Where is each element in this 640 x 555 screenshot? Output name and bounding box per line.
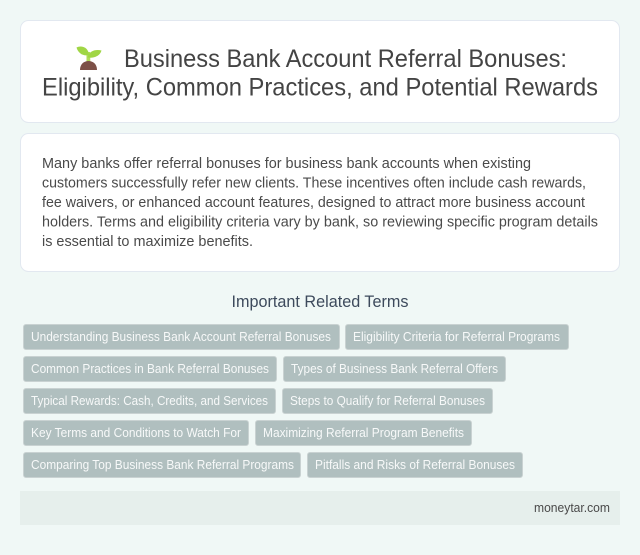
description text: fee waivers, or enhanced account features, designed to attract more business account	[42, 194, 586, 211]
tag 10: Pitfalls and Risks of Referral Bonuses	[315, 458, 515, 472]
tag 2	[346, 324, 568, 350]
tag 2: Eligibility Criteria for Referral Programs	[353, 330, 560, 344]
tag 3: Common Practices in Bank Referral Bonuses	[31, 362, 269, 376]
tag 5: Typical Rewards: Cash, Credits, and Services	[31, 394, 268, 408]
tag 1	[24, 324, 340, 350]
description text: customers successfully refer new clients. These incentives often include cash rewards,	[42, 174, 586, 192]
description text: holders. Terms and eligibility criteria vary by bank, so reviewing specific program details	[42, 214, 598, 230]
tag 4: Types of Business Bank Referral Offers	[291, 362, 498, 376]
tag 9	[24, 452, 300, 478]
description text: Many banks offer referral bonuses for business bank accounts when existing	[42, 155, 531, 172]
tag 9: Comparing Top Business Bank Referral Programs	[31, 458, 294, 472]
footer: moneytar.com	[534, 501, 610, 515]
title: Business Bank Account Referral Bonuses:	[124, 45, 567, 73]
panel: description	[20, 134, 620, 272]
tag 4	[284, 356, 506, 382]
panel: title card	[20, 20, 620, 122]
tag 6: Steps to Qualify for Referral Bonuses	[290, 394, 485, 408]
tag 6	[282, 388, 492, 414]
tag 8: Maximizing Referral Program Benefits	[263, 426, 464, 440]
description text: is essential to maximize benefits.	[42, 233, 253, 250]
tag 5	[24, 388, 276, 414]
icon: seedling	[76, 46, 102, 70]
title: Eligibility, Common Practices, and Potential Rewards	[42, 74, 598, 102]
tag list	[24, 324, 568, 478]
title	[42, 45, 598, 102]
tag 10	[308, 452, 522, 478]
tag 7	[24, 420, 248, 446]
tag 1: Understanding Business Bank Account Referral Bonuses	[31, 330, 331, 344]
heading: related terms: Important Related Terms	[232, 293, 408, 311]
tag 8	[256, 420, 472, 446]
tag 7: Key Terms and Conditions to Watch For	[31, 426, 241, 440]
description text	[42, 155, 598, 250]
footer	[20, 491, 620, 525]
tag 3	[24, 356, 276, 382]
